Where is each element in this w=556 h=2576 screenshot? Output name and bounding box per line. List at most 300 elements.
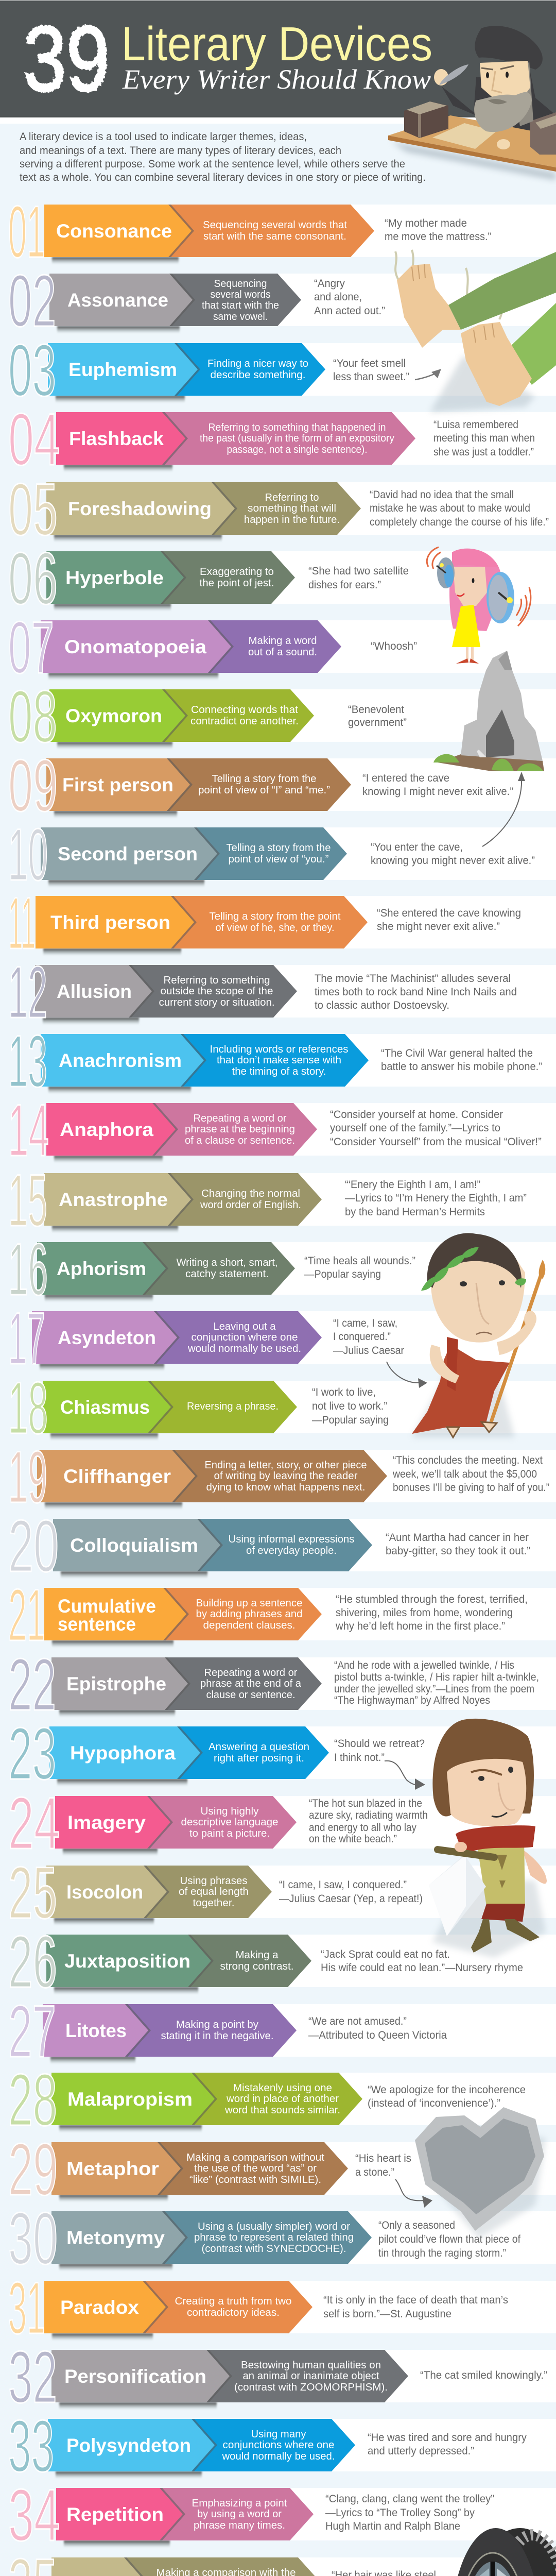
definition: of equal length xyxy=(179,1886,249,1897)
example xyxy=(279,1879,423,1905)
number 20: 20 xyxy=(8,1505,59,1587)
example: to classic author Dostoevsky. xyxy=(315,999,449,1011)
name: Consonance xyxy=(56,221,172,242)
name: Second person xyxy=(58,843,198,865)
illustration: cave xyxy=(433,651,544,771)
number 05: 05 xyxy=(8,469,58,551)
definition xyxy=(200,1667,302,1701)
example: “It is only in the face of death that man’s xyxy=(323,2294,508,2306)
header band xyxy=(0,0,556,118)
definition: the point of jest. xyxy=(200,578,274,589)
name xyxy=(58,1596,156,1635)
definition: by using a word or xyxy=(197,2509,282,2520)
example: Ann acted out.” xyxy=(314,305,385,317)
name: Assonance xyxy=(67,290,168,311)
definition: Emphasizing a point xyxy=(192,2498,287,2509)
name: Hyperbole xyxy=(65,567,164,588)
number 22: 22 xyxy=(8,1644,56,1726)
subtitle: Every Writer Should Know xyxy=(122,64,431,95)
device 17: Asyndeton: 17 xyxy=(8,1298,45,1380)
definition: start with the same consonant. xyxy=(203,231,346,242)
definition: Answering a question xyxy=(208,1741,309,1753)
definition: of view of he, she, or they. xyxy=(215,922,335,934)
example: a stone.” xyxy=(355,2166,394,2178)
device 07: Onomatopoeia xyxy=(8,607,556,689)
example: —Lyrics to “I’m Henery the Eighth, I am” xyxy=(345,1192,527,1204)
example: shivering, miles from home, wondering xyxy=(336,1607,513,1619)
device 19: Cliffhanger: 19 xyxy=(8,1436,47,1518)
device 28: Malapropism xyxy=(8,2059,556,2141)
definition xyxy=(196,1598,303,1631)
example: she was just a toddler.” xyxy=(433,446,534,458)
device 01: Consonance: 01 xyxy=(8,191,45,273)
example: —Popular saying xyxy=(312,1414,389,1426)
definition: Making a xyxy=(236,1950,279,1961)
number 29: 29 xyxy=(8,2129,58,2211)
definition: Mistakenly using one xyxy=(233,2082,332,2094)
example: times both to rock band Nine Inch Nails and xyxy=(315,986,517,998)
example: “Your feet smell xyxy=(333,358,406,369)
example: “Jack Sprat could eat no fat. xyxy=(321,1948,450,1960)
device 15: Anastrophe xyxy=(8,1160,556,1242)
example: “This concludes the meeting. Next xyxy=(393,1454,543,1466)
device 35: Simile xyxy=(8,2544,556,2576)
name: Litotes xyxy=(65,2020,127,2041)
definition: outside the scope of the xyxy=(161,986,273,997)
example: “The hot sun blazed in the xyxy=(309,1798,422,1809)
intro text: serving a different purpose. Some work at the sentence level, while others serve the xyxy=(20,158,405,170)
device 31: Paradox: 31 xyxy=(8,2267,45,2349)
arrow to feet xyxy=(415,369,441,380)
example: mistake he was about to make would xyxy=(370,502,530,514)
definition: Making a word xyxy=(248,635,317,647)
definition xyxy=(187,1321,301,1354)
example: “The cat smiled knowingly.” xyxy=(420,2369,547,2381)
name: Euphemism xyxy=(68,359,177,380)
definition: out of a sound. xyxy=(248,647,317,658)
example: “Consider Yourself” from the musical “Oliver!” xyxy=(330,1136,542,1148)
name: Repetition xyxy=(66,2504,164,2525)
definition: to paint a picture. xyxy=(189,1828,270,1839)
name: Malapropism xyxy=(67,2089,193,2110)
example xyxy=(362,772,513,798)
definition xyxy=(209,911,341,934)
device 09: First person xyxy=(8,745,556,827)
definition xyxy=(159,975,275,1008)
example: I think not.” xyxy=(334,1752,385,1764)
number 27: 27 xyxy=(8,1991,56,2073)
example: “I came, I saw, I conquered.” xyxy=(279,1879,407,1891)
example: “And he rode with a jewelled twinkle, / His xyxy=(334,1659,514,1671)
example: less than sweet.” xyxy=(333,371,409,383)
definition xyxy=(227,842,331,865)
example: knowing you might never exit alive.” xyxy=(371,855,535,867)
example xyxy=(368,2432,527,2457)
example: “She had two satellite xyxy=(308,565,409,577)
name: First person xyxy=(62,774,173,795)
example: Hugh Martin and Ralph Blane xyxy=(325,2520,460,2532)
number 23: 23 xyxy=(8,1713,56,1795)
example: “David had no idea that the small xyxy=(370,489,514,501)
device 03: Euphemism xyxy=(8,330,556,412)
illustration: tire xyxy=(450,2528,556,2576)
example xyxy=(334,1659,539,1706)
example: —Lyrics to “The Trolley Song” by xyxy=(325,2507,475,2519)
definition: something that will xyxy=(248,503,336,514)
example: —Attributed to Queen Victoria xyxy=(308,2029,447,2041)
name: Onomatopoeia xyxy=(64,636,206,657)
definition xyxy=(210,1044,348,1077)
example: “He stumbled through the forest, terrified, xyxy=(336,1594,528,1605)
definition: phrase many times. xyxy=(194,2520,285,2531)
definition: Exaggerating to xyxy=(200,566,274,578)
device 11: Third person xyxy=(8,883,556,964)
definition: phrase at the beginning xyxy=(185,1124,295,1135)
definition: Telling a story from the xyxy=(227,842,331,854)
definition: Referring to something xyxy=(164,975,270,986)
device 12: Allusion: 12 xyxy=(8,952,47,1033)
definition: (contrast with ZOOMORPHISM). xyxy=(234,2382,388,2393)
definition: same vowel. xyxy=(213,311,268,323)
definition: Referring to something that happened in xyxy=(208,422,386,433)
definition: Finding a nicer way to xyxy=(207,358,308,369)
device 30: Metonymy xyxy=(8,2198,556,2280)
example xyxy=(330,1109,542,1148)
name: Oxymoron xyxy=(65,705,162,726)
example xyxy=(304,1255,415,1280)
name: Hypophora xyxy=(70,1742,176,1764)
number 33: 33 xyxy=(8,2405,54,2487)
definition: Using a (usually simpler) word or xyxy=(198,2221,350,2232)
device 02: Assonance xyxy=(8,260,556,342)
definition xyxy=(203,219,347,242)
example: (instead of ‘inconvenience’).” xyxy=(368,2097,500,2109)
example xyxy=(334,1738,425,1764)
device 12: Allusion xyxy=(8,952,556,1033)
definition: catchy statement. xyxy=(185,1268,269,1280)
definition xyxy=(198,773,330,796)
example xyxy=(370,489,549,528)
device 31: Paradox xyxy=(8,2267,556,2349)
example xyxy=(321,1948,523,1974)
example: and utterly depressed.” xyxy=(368,2445,474,2457)
device 27: Litotes xyxy=(8,1991,556,2073)
name: Chiasmus xyxy=(60,1397,150,1418)
device 10: Second person xyxy=(8,814,556,896)
example: —Julius Caesar (Yep, a repeat!) xyxy=(279,1893,423,1905)
example: “My mother made xyxy=(385,217,467,229)
device 10: Second person: 10 xyxy=(8,814,48,896)
example: “Only a seasoned xyxy=(378,2219,455,2231)
definition: Telling a story from the point xyxy=(209,911,341,922)
example: “We apologize for the incoherence xyxy=(368,2084,526,2096)
device 17: Asyndeton xyxy=(8,1298,556,1380)
definition: that start with the xyxy=(202,300,279,311)
definition: Writing a short, smart, xyxy=(176,1257,278,1268)
definition: happen in the future. xyxy=(244,514,340,526)
example: she might never exit alive.” xyxy=(377,921,500,933)
number 08: 08 xyxy=(8,676,57,758)
definition xyxy=(205,1460,367,1493)
device 16: Aphorism xyxy=(8,1229,556,1311)
curved arrow to cave xyxy=(482,772,525,846)
definition xyxy=(194,2221,354,2255)
device 16: Aphorism: 16 xyxy=(8,1229,48,1311)
device 04: Flashback xyxy=(8,399,556,481)
name: Anastrophe xyxy=(59,1189,168,1210)
name: Anaphora xyxy=(60,1119,153,1140)
curved arrow to Caesar xyxy=(387,1362,427,1388)
example xyxy=(348,704,407,728)
definition: point of view of “I” and “me.” xyxy=(198,785,330,796)
number 09: 09 xyxy=(8,745,58,827)
example xyxy=(371,841,535,867)
definition xyxy=(186,2152,324,2185)
definition: contradictory ideas. xyxy=(187,2307,280,2318)
example xyxy=(433,419,535,458)
definition xyxy=(181,1806,278,1839)
name: Third person xyxy=(50,912,170,933)
device 18: Chiasmus xyxy=(8,1367,556,1449)
example: by the band Herman’s Hermits xyxy=(345,1206,485,1218)
example: “Consider yourself at home. Consider xyxy=(330,1109,503,1121)
definition xyxy=(221,2429,335,2462)
definition: the past (usually in the form of an expository xyxy=(200,433,394,444)
example: “I came, I saw, xyxy=(333,1317,397,1329)
example: tin through the raging storm.” xyxy=(378,2247,506,2259)
definition: conjunction where one xyxy=(192,1332,298,1343)
example xyxy=(392,1454,549,1494)
definition: current story or situation. xyxy=(159,997,275,1008)
name: Juxtaposition xyxy=(64,1951,190,1972)
definition xyxy=(190,704,299,727)
definition xyxy=(248,635,317,658)
name: Paradox xyxy=(60,2297,139,2318)
example: The movie “The Machinist” alludes several xyxy=(315,973,511,985)
example: me move the mattress.” xyxy=(385,231,491,243)
definition: Sequencing xyxy=(214,278,267,290)
name: Foreshadowing xyxy=(68,498,212,519)
definition: phrase at the end of a xyxy=(200,1678,302,1689)
definition xyxy=(192,2498,287,2531)
title: Literary Devices: Literary Devices xyxy=(121,17,432,71)
definition: conjunctions where one xyxy=(222,2439,335,2451)
definition: Using phrases xyxy=(180,1875,247,1887)
example xyxy=(378,2219,520,2259)
definition: Using informal expressions xyxy=(229,1534,354,1545)
definition: that don’t make sense with xyxy=(217,1055,341,1066)
example xyxy=(345,1179,527,1218)
name: Metaphor xyxy=(66,2158,159,2179)
definition xyxy=(200,422,394,455)
example xyxy=(323,2294,508,2320)
definition: Bestowing human qualities on xyxy=(241,2360,381,2371)
device 15: Anastrophe: 15 xyxy=(8,1160,47,1242)
name: Cliffhanger xyxy=(63,1466,171,1487)
definition xyxy=(202,278,279,323)
definition: dying to know what happens next. xyxy=(206,1482,366,1493)
name: Personification xyxy=(64,2366,206,2387)
example: “Whoosh” xyxy=(371,640,417,652)
device 11: Third person: 11 xyxy=(8,883,36,964)
device 19: Cliffhanger xyxy=(8,1436,556,1518)
number 34: 34 xyxy=(8,2475,60,2556)
definition xyxy=(200,566,274,589)
number 03: 03 xyxy=(8,330,56,412)
device 21: Cumulative sentence: 21 xyxy=(8,1574,45,1656)
illustration: writer at desk xyxy=(388,26,556,180)
example: yourself one of the family.”—Lyrics to xyxy=(330,1122,500,1134)
device 21: Cumulative sentence xyxy=(8,1574,556,1656)
device 25: Isocolon xyxy=(8,1852,556,1934)
example: dishes for ears.” xyxy=(308,579,381,591)
definition xyxy=(200,1188,301,1211)
example: “I entered the cave xyxy=(362,772,449,784)
name: Cumulative xyxy=(58,1596,156,1617)
definition: Reversing a phrase. xyxy=(187,1401,279,1412)
example: pistol butts a-twinkle, / His rapier hilt a-twinkle, xyxy=(334,1671,539,1683)
example: baby-gitter, so they took it out.” xyxy=(386,1545,530,1557)
name: Asyndeton xyxy=(58,1327,156,1348)
number 06: 06 xyxy=(8,538,58,620)
number 25: 25 xyxy=(8,1852,57,1934)
definition xyxy=(220,1950,293,1972)
example: government” xyxy=(348,717,407,728)
definition: Making a comparison without xyxy=(186,2152,324,2163)
example: under the jewelled sky.”—Lines from the poem xyxy=(334,1683,534,1695)
definition: would normally be used. xyxy=(187,1343,301,1354)
definition: Repeating a word or xyxy=(194,1113,287,1124)
definition: of everyday people. xyxy=(246,1545,337,1556)
example: His wife could eat no lean.”—Nursery rhyme xyxy=(321,1962,523,1974)
number 32: 32 xyxy=(8,2336,57,2418)
illustration: stone heart xyxy=(415,2107,546,2239)
example: —Popular saying xyxy=(304,1268,381,1280)
example xyxy=(377,907,521,933)
definition: Creating a truth from two xyxy=(175,2296,291,2307)
definition: Using highly xyxy=(201,1806,258,1817)
definition: several words xyxy=(210,289,271,300)
definition xyxy=(175,2296,291,2318)
example: why he’d left home in the first place.” xyxy=(335,1620,505,1632)
definition xyxy=(161,2019,274,2042)
number 02: 02 xyxy=(8,260,56,342)
definition: Sequencing several words that xyxy=(203,219,347,231)
example: pilot could’ve flown that piece of xyxy=(378,2233,520,2245)
device 18: Chiasmus: 18 xyxy=(8,1367,48,1449)
name: Isocolon xyxy=(66,1882,143,1903)
illustration: girl with satellite-dish ears xyxy=(427,547,531,664)
intro text: and meanings of a text. There are many types of literary devices, each xyxy=(20,145,341,157)
name: Colloquialism xyxy=(70,1535,198,1556)
definition: Making a point by xyxy=(176,2019,258,2030)
example: and alone, xyxy=(314,291,362,303)
illustration: soldier with sword xyxy=(429,1719,547,1958)
definition: dependent clauses. xyxy=(203,1620,296,1631)
device 14: Anaphora: 14 xyxy=(8,1090,49,1172)
number 24: 24 xyxy=(8,1783,60,1865)
definition: contradict one another. xyxy=(190,716,299,727)
device 13: Anachronism: 13 xyxy=(8,1021,47,1103)
example xyxy=(312,1386,389,1426)
definition: word in place of another xyxy=(226,2093,339,2105)
definition: clause or sentence. xyxy=(206,1689,296,1701)
definition: phrase to represent a related thing xyxy=(194,2232,354,2243)
definition: Telling a story from the xyxy=(212,773,316,785)
example xyxy=(368,2084,526,2109)
example: “The Highwayman” by Alfred Noyes xyxy=(334,1694,490,1706)
example xyxy=(335,1594,528,1632)
example: “Angry xyxy=(314,278,345,290)
title number 39: 39 xyxy=(23,7,110,111)
definition: “like” (contrast with SIMILE). xyxy=(189,2174,321,2185)
definition: describe something. xyxy=(210,369,306,381)
definition xyxy=(207,358,308,381)
definition xyxy=(234,2360,388,2393)
name: Flashback xyxy=(69,428,164,449)
example: self is born.”—St. Augustine xyxy=(323,2308,451,2320)
example: azure sky, radiating warmth xyxy=(309,1809,428,1821)
example xyxy=(355,2153,411,2178)
definition: Leaving out a xyxy=(213,1321,276,1332)
definition: together. xyxy=(193,1897,235,1909)
definition: passage, not a single sentence). xyxy=(227,444,368,455)
definition: would normally be used. xyxy=(221,2451,335,2462)
definition: right after posing it. xyxy=(214,1753,304,1764)
definition: the timing of a story. xyxy=(232,1066,326,1077)
definition xyxy=(244,492,340,526)
definition: of a clause or sentence. xyxy=(185,1135,295,1146)
example: “Should we retreat? xyxy=(334,1738,425,1750)
intro text: text as a whole. You can combine several literary devices in one story or piece of writing. xyxy=(20,172,426,183)
example: knowing I might never exit alive.” xyxy=(362,786,513,798)
example xyxy=(315,973,517,1011)
curved arrow to soldier xyxy=(385,1761,425,1790)
definition: Using many xyxy=(251,2429,306,2440)
definition: point of view of “you.” xyxy=(229,854,328,865)
example xyxy=(381,1047,542,1073)
example: and energy to all who lay xyxy=(309,1822,416,1834)
example xyxy=(333,358,409,383)
name: Allusion xyxy=(57,981,132,1002)
definition: an animal or inanimate object xyxy=(243,2370,379,2382)
device 01: Consonance xyxy=(8,191,556,273)
device 32: Personification xyxy=(8,2336,556,2418)
definition: the use of the word “as” or xyxy=(194,2163,317,2174)
device 26: Juxtaposition xyxy=(8,1921,556,2003)
definition: word order of English. xyxy=(200,1199,301,1211)
example: “Luisa remembered xyxy=(433,419,518,431)
example: week, we’ll talk about the $5,000 xyxy=(392,1468,537,1480)
name: Epistrophe xyxy=(66,1673,166,1694)
device 29: Metaphor xyxy=(8,2129,556,2211)
device 14: Anaphora xyxy=(8,1090,556,1172)
example xyxy=(325,2493,494,2532)
definition: Building up a sentence xyxy=(196,1598,303,1609)
definition xyxy=(224,2082,340,2116)
device 13: Anachronism xyxy=(8,1021,556,1103)
name: Metonymy xyxy=(66,2227,165,2248)
example: not live to work.” xyxy=(312,1400,387,1412)
example: battle to answer his mobile phone.” xyxy=(381,1061,542,1073)
definition: stating it in the negative. xyxy=(161,2030,274,2042)
number 07: 07 xyxy=(8,607,54,689)
example xyxy=(308,2015,447,2041)
curved arrow to heart xyxy=(395,2179,432,2208)
number 28: 28 xyxy=(8,2059,57,2141)
illustration: smelly feet xyxy=(395,250,556,412)
number 04: 04 xyxy=(8,399,60,481)
